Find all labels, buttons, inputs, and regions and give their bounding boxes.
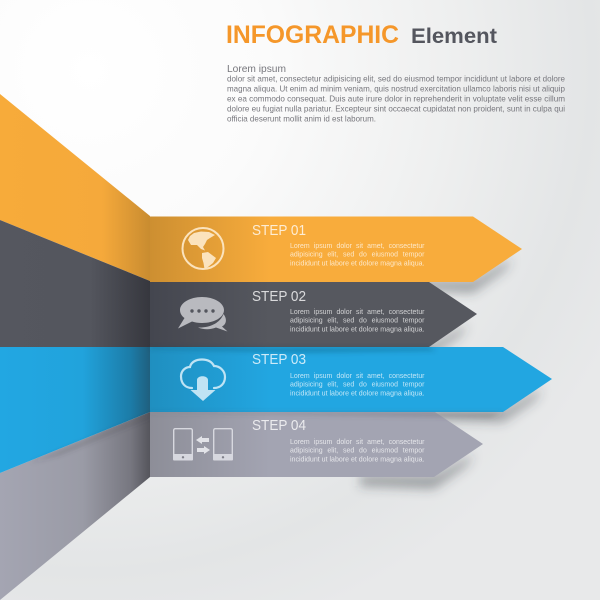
panel: step 3 — [150, 347, 552, 412]
title: Element — [411, 25, 497, 48]
description — [290, 242, 425, 267]
description: adipisicing elit, sed do eiusmod tempor — [290, 317, 425, 325]
step heading: STEP 04 — [252, 417, 306, 434]
description: incididunt ut labore et dolore magna aliqua. — [290, 259, 425, 267]
description — [290, 308, 425, 333]
step heading: STEP 02 — [252, 288, 306, 305]
band shadow from dark arrow — [150, 347, 436, 353]
panel: orange wall — [0, 94, 150, 281]
band shadow from blue arrow — [150, 412, 503, 418]
intro text: officia deserunt mollit anim id est laborum. — [227, 114, 376, 124]
panel: dark wall — [0, 220, 150, 347]
panel: step 1 — [150, 216, 522, 282]
intro text: Lorem ipsum — [227, 63, 286, 75]
icon: cloud download — [181, 360, 225, 401]
icon: globe — [182, 228, 224, 269]
panel: step 2 — [150, 282, 477, 347]
arrow band — [150, 216, 522, 282]
intro text: dolore eu fugiat nulla pariatur. Excepteur sint occaecat cupidatat non proident, sunt in culpa qui — [227, 104, 565, 114]
step heading: STEP 01 — [252, 222, 306, 239]
description — [290, 438, 425, 463]
description: Lorem ipsum dolor sit amet, consectetur — [290, 372, 425, 380]
description — [290, 372, 425, 397]
intro text: magna aliqua. Ut enim ad minim veniam, quis nostrud exercitation ullamco laboris nisi ut aliquip — [227, 84, 565, 94]
step heading: STEP 03 — [252, 351, 306, 368]
description: incididunt ut labore et dolore magna aliqua. — [290, 455, 425, 463]
panel: step 4 — [150, 412, 503, 477]
description: Lorem ipsum dolor sit amet, consectetur — [290, 438, 425, 446]
panel: blue wall — [0, 347, 150, 473]
arrow shadows — [360, 258, 542, 489]
intro text — [227, 63, 565, 124]
description: Lorem ipsum dolor sit amet, consectetur — [290, 308, 425, 316]
icon: speech bubbles — [178, 297, 228, 332]
title — [226, 21, 497, 49]
icon: phones exchange — [173, 429, 233, 460]
arrow band — [150, 282, 477, 347]
description: adipisicing elit, sed do eiusmod tempor — [290, 251, 425, 259]
intro text: dolor sit amet, consectetur adipisicing elit, sed do eiusmod tempor incididunt ut labore et dolore — [227, 74, 565, 84]
panel: gray wall — [0, 412, 150, 600]
arrow band — [150, 347, 552, 412]
description: Lorem ipsum dolor sit amet, consectetur — [290, 242, 425, 250]
intro text: ex ea commodo consequat. Duis aute irure dolor in reprehenderit in voluptate velit esse cillum — [227, 94, 565, 104]
title: INFOGRAPHIC — [226, 21, 399, 49]
description: adipisicing elit, sed do eiusmod tempor — [290, 447, 425, 455]
arrow band — [150, 412, 483, 477]
description: adipisicing elit, sed do eiusmod tempor — [290, 381, 425, 389]
wall shadow under blue — [30, 414, 150, 463]
description: incididunt ut labore et dolore magna aliqua. — [290, 325, 425, 333]
description: incididunt ut labore et dolore magna aliqua. — [290, 389, 425, 397]
